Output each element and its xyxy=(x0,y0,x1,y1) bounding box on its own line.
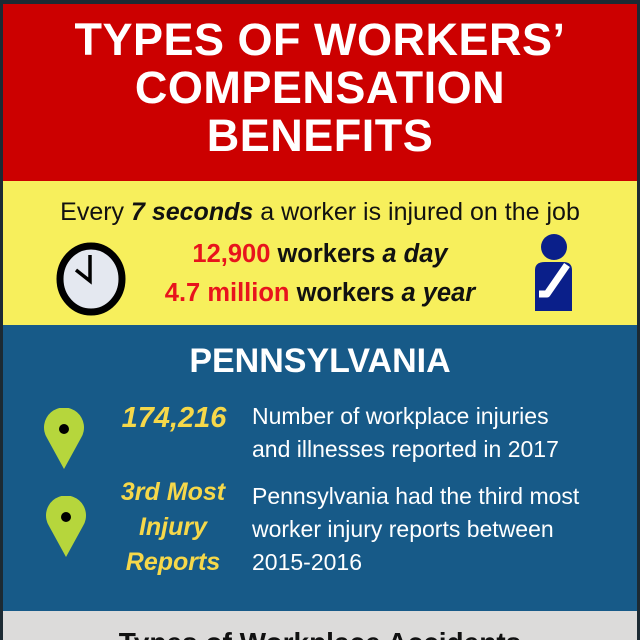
icon: pin 1 xyxy=(44,408,84,469)
text: injuries 2017: Number of workplace injuries xyxy=(252,403,549,429)
panel: pennsylvania xyxy=(3,325,637,611)
yearly stat: 4.7 million workers a year xyxy=(165,279,475,307)
text: injuries 2017 xyxy=(252,403,559,462)
title: BENEFITS xyxy=(207,110,433,161)
text: third most: Pennsylvania had the third most xyxy=(252,483,579,509)
headline stat: Every 7 seconds a worker is injured on the job xyxy=(60,198,580,226)
icon: clock xyxy=(56,242,126,316)
daily stat: 12,900 workers a day xyxy=(192,240,448,268)
icon: pin 2 xyxy=(46,496,86,557)
stat: 3rd most: Injury xyxy=(139,513,207,541)
panel: national stats xyxy=(3,181,637,325)
stat: 174,216: 174,216 xyxy=(122,402,226,434)
panel: accident types xyxy=(3,611,637,640)
stat: 3rd most: 3rd Most xyxy=(121,478,225,506)
stat: 3rd most xyxy=(121,478,226,576)
icon: injured worker xyxy=(535,234,572,311)
stat: 3rd most: Reports xyxy=(126,548,220,576)
title: COMPENSATION xyxy=(135,62,505,113)
heading: PENNSYLVANIA xyxy=(189,342,451,380)
text: third most: 2015-2016 xyxy=(252,549,362,575)
text: third most: worker injury reports between xyxy=(252,516,554,542)
text: injuries 2017: and illnesses reported in 2017 xyxy=(252,436,559,462)
text: third most xyxy=(252,483,580,575)
title: TYPES OF WORKERS’ xyxy=(74,14,566,65)
panel: title xyxy=(3,4,637,181)
title xyxy=(74,14,566,161)
